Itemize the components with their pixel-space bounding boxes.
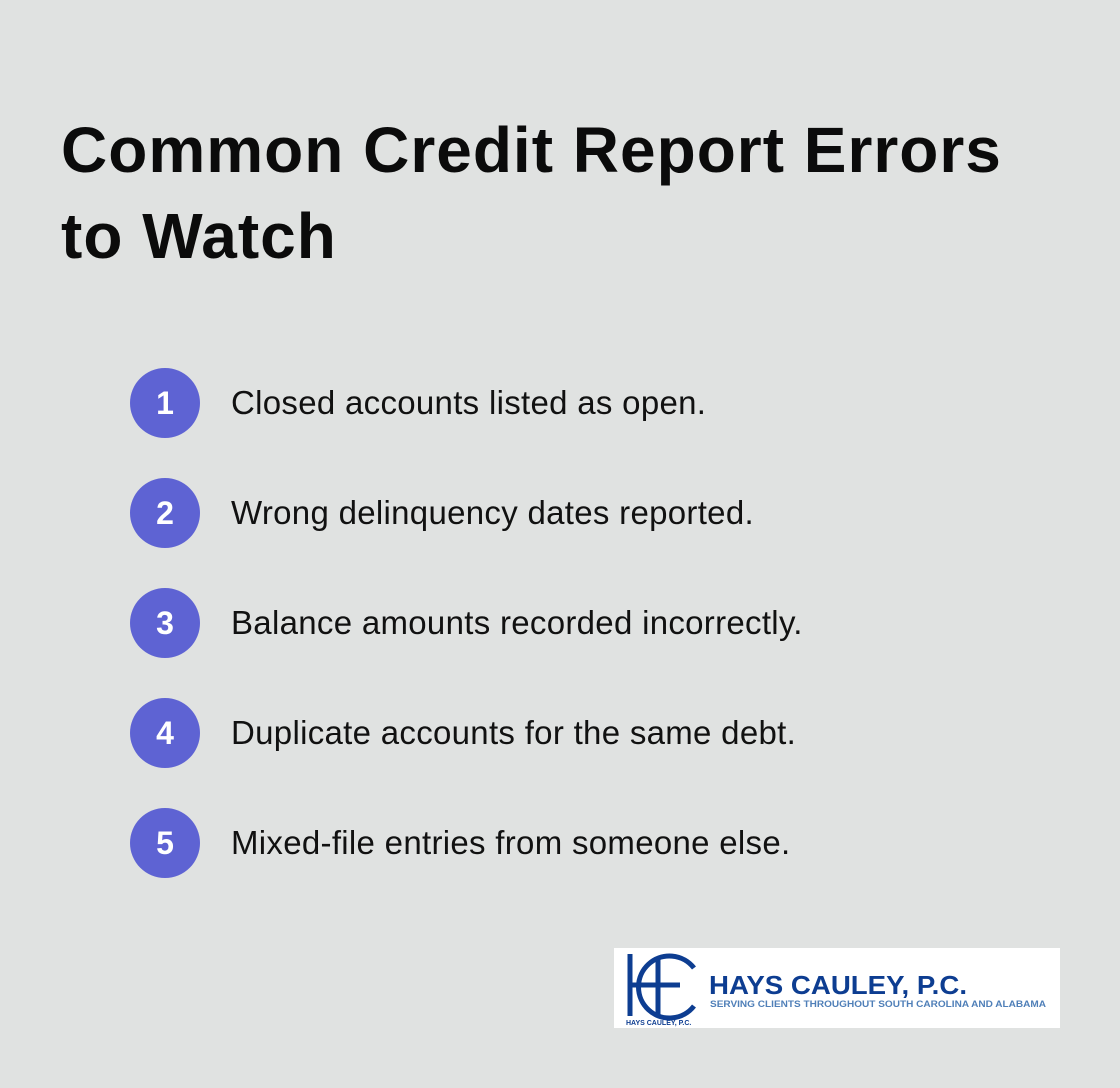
list item 4 bbox=[130, 698, 796, 768]
list item 1: Closed accounts listed as open. bbox=[231, 384, 706, 421]
logo: HAYS CAULEY, P.C. bbox=[709, 970, 967, 1000]
list item 1: 1 bbox=[156, 385, 174, 421]
title: Common Credit Report Errors bbox=[61, 114, 1002, 186]
list item 5 bbox=[130, 808, 790, 878]
list item 3: Balance amounts recorded incorrectly. bbox=[231, 604, 803, 641]
logo: HAYS CAULEY, P.C. bbox=[626, 1020, 691, 1027]
logo: SERVING CLIENTS THROUGHOUT SOUTH CAROLINA AND ALABAMA bbox=[710, 999, 1046, 1010]
list item 2 bbox=[130, 478, 754, 548]
list item 5: 5 bbox=[156, 825, 174, 861]
title: to Watch bbox=[61, 200, 337, 272]
list item 2: 2 bbox=[156, 495, 174, 531]
list item 3: 3 bbox=[156, 605, 174, 641]
icon: HC monogram bbox=[630, 954, 694, 1018]
list item 4: 4 bbox=[156, 715, 174, 751]
title bbox=[61, 114, 1002, 272]
list item 1 bbox=[130, 368, 706, 438]
list item 4: Duplicate accounts for the same debt. bbox=[231, 714, 796, 751]
list item 5: Mixed-file entries from someone else. bbox=[231, 824, 790, 861]
logo bbox=[614, 948, 1060, 1028]
list item 2: Wrong delinquency dates reported. bbox=[231, 494, 754, 531]
list item 3 bbox=[130, 588, 803, 658]
